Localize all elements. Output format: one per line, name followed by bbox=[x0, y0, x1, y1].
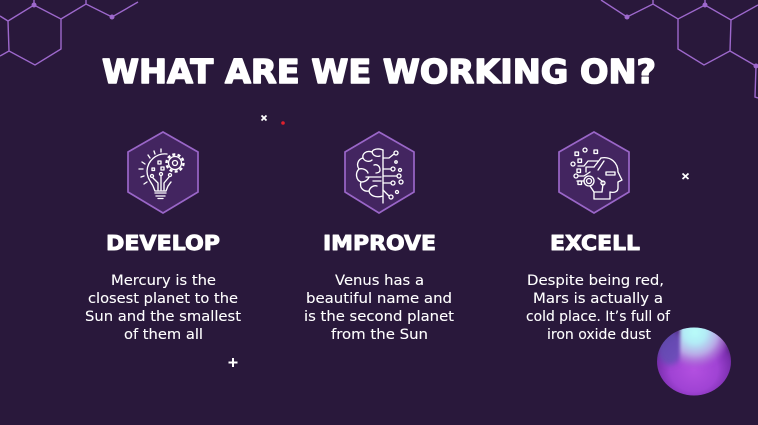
text: develop description: Sun and the smallest bbox=[85, 309, 241, 325]
text: excell description bbox=[526, 273, 671, 343]
panel: develop bbox=[85, 132, 241, 343]
text: excell description: iron oxide dust bbox=[547, 327, 651, 343]
text: improve description: beautiful name and bbox=[306, 291, 452, 307]
text: improve description: is the second planet bbox=[304, 309, 454, 325]
icon: brain with circuit bbox=[345, 132, 414, 213]
text: excell description: Mars is actually a bbox=[533, 291, 663, 307]
heading: develop: DEVELOP bbox=[106, 231, 220, 255]
text: improve description bbox=[304, 273, 454, 343]
panel: excell bbox=[526, 132, 671, 343]
text: develop description: closest planet to the bbox=[88, 291, 238, 307]
text: excell description: cold place. It’s full of bbox=[526, 309, 671, 325]
icon: light bulb with gear bbox=[128, 132, 198, 213]
decoration: white plus bbox=[228, 358, 238, 367]
text: develop description: Mercury is the bbox=[111, 273, 216, 289]
heading: excell: EXCELL bbox=[550, 231, 640, 255]
icon: AI head with circuit bbox=[559, 132, 629, 213]
panel: improve bbox=[304, 132, 454, 343]
text: improve description: from the Sun bbox=[331, 327, 428, 343]
hexagon network: top left bbox=[0, 0, 138, 65]
decoration: red dot bbox=[281, 121, 285, 125]
decoration: white cross right bbox=[682, 174, 688, 179]
decoration: glossy purple sphere bbox=[657, 328, 731, 396]
text: develop description bbox=[85, 273, 241, 343]
hexagon network: top right bbox=[601, 0, 758, 98]
heading: improve: IMPROVE bbox=[323, 231, 436, 255]
text: excell description: Despite being red, bbox=[527, 273, 664, 289]
text: improve description: Venus has a bbox=[335, 273, 424, 289]
decoration: white cross bbox=[262, 116, 266, 120]
text: develop description: of them all bbox=[124, 327, 203, 343]
title: WHAT ARE WE WORKING ON? bbox=[102, 52, 656, 91]
